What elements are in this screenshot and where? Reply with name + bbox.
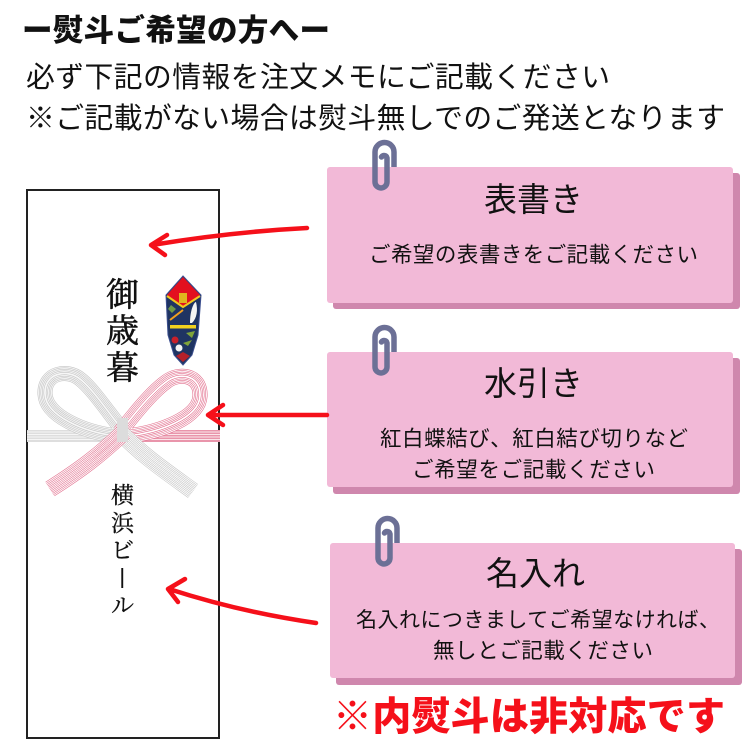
heading: 表書き: 表書き xyxy=(484,181,583,218)
sender name: 横浜ビール: ル xyxy=(111,593,134,618)
white loop xyxy=(45,374,124,436)
noshi greeting: 御歳暮 xyxy=(106,277,139,387)
body text: ご希望の表書きをご記載ください xyxy=(369,243,698,267)
icon: paperclip 2 (rear leg) xyxy=(375,328,394,373)
panel: 名入れ xyxy=(330,543,742,685)
mizuhiki cord xyxy=(27,374,220,491)
arrow: to 名入れ position xyxy=(168,579,316,623)
title: ー熨斗ご希望の方へー xyxy=(22,13,330,48)
sender name: 横浜ビール xyxy=(111,483,135,618)
heading: 名入れ: 名入れ xyxy=(486,555,585,592)
red cord band xyxy=(122,430,220,442)
noshi greeting: 御歳暮: 御 xyxy=(106,277,139,314)
panel: 表書き xyxy=(327,167,740,309)
notice text xyxy=(26,62,725,135)
icon: paperclip 2 (front) xyxy=(375,352,387,373)
arrow: to 水引き position xyxy=(208,405,327,425)
notice text: ※ご記載がない場合は熨斗無しでのご発送となります xyxy=(26,103,725,135)
arrow: to 表書き position xyxy=(151,228,307,255)
panel: 水引き xyxy=(327,352,740,494)
sender name: 横浜ビール: 浜 xyxy=(111,511,135,536)
body text: 名入れにつきましてご希望なければ、 xyxy=(356,609,720,632)
icon: paperclip 1 (rear leg) xyxy=(375,142,394,188)
body text xyxy=(380,427,688,482)
body text: 紅白蝶結び、紅白結び切りなど xyxy=(380,427,688,451)
red loop xyxy=(120,376,200,436)
sender name: 横浜ビール: ビ xyxy=(111,538,134,563)
red tail xyxy=(50,432,124,489)
noshi greeting: 御歳暮: 暮 xyxy=(106,350,139,387)
noshi paper xyxy=(27,190,219,738)
noshi greeting: 御歳暮: 歳 xyxy=(106,313,139,350)
notice text: 必ず下記の情報を注文メモにご記載ください xyxy=(26,62,610,94)
cord knot xyxy=(117,418,128,442)
icon: paperclip 3 (rear leg) xyxy=(378,518,397,564)
body text: 無しとご記載ください xyxy=(433,639,653,663)
icon: noshi ornament xyxy=(166,276,201,365)
body text xyxy=(356,609,720,663)
body text: ご希望をご記載ください xyxy=(412,458,655,482)
warning text: ※内熨斗は非対応です xyxy=(333,696,725,739)
icon: paperclip 3 (front) xyxy=(378,543,390,564)
icon: paperclip 1 (front) xyxy=(375,167,387,188)
white cord band xyxy=(27,430,122,442)
sender name: 横浜ビール: 横 xyxy=(111,483,134,508)
white tail xyxy=(120,432,193,491)
heading: 水引き: 水引き xyxy=(484,365,583,402)
